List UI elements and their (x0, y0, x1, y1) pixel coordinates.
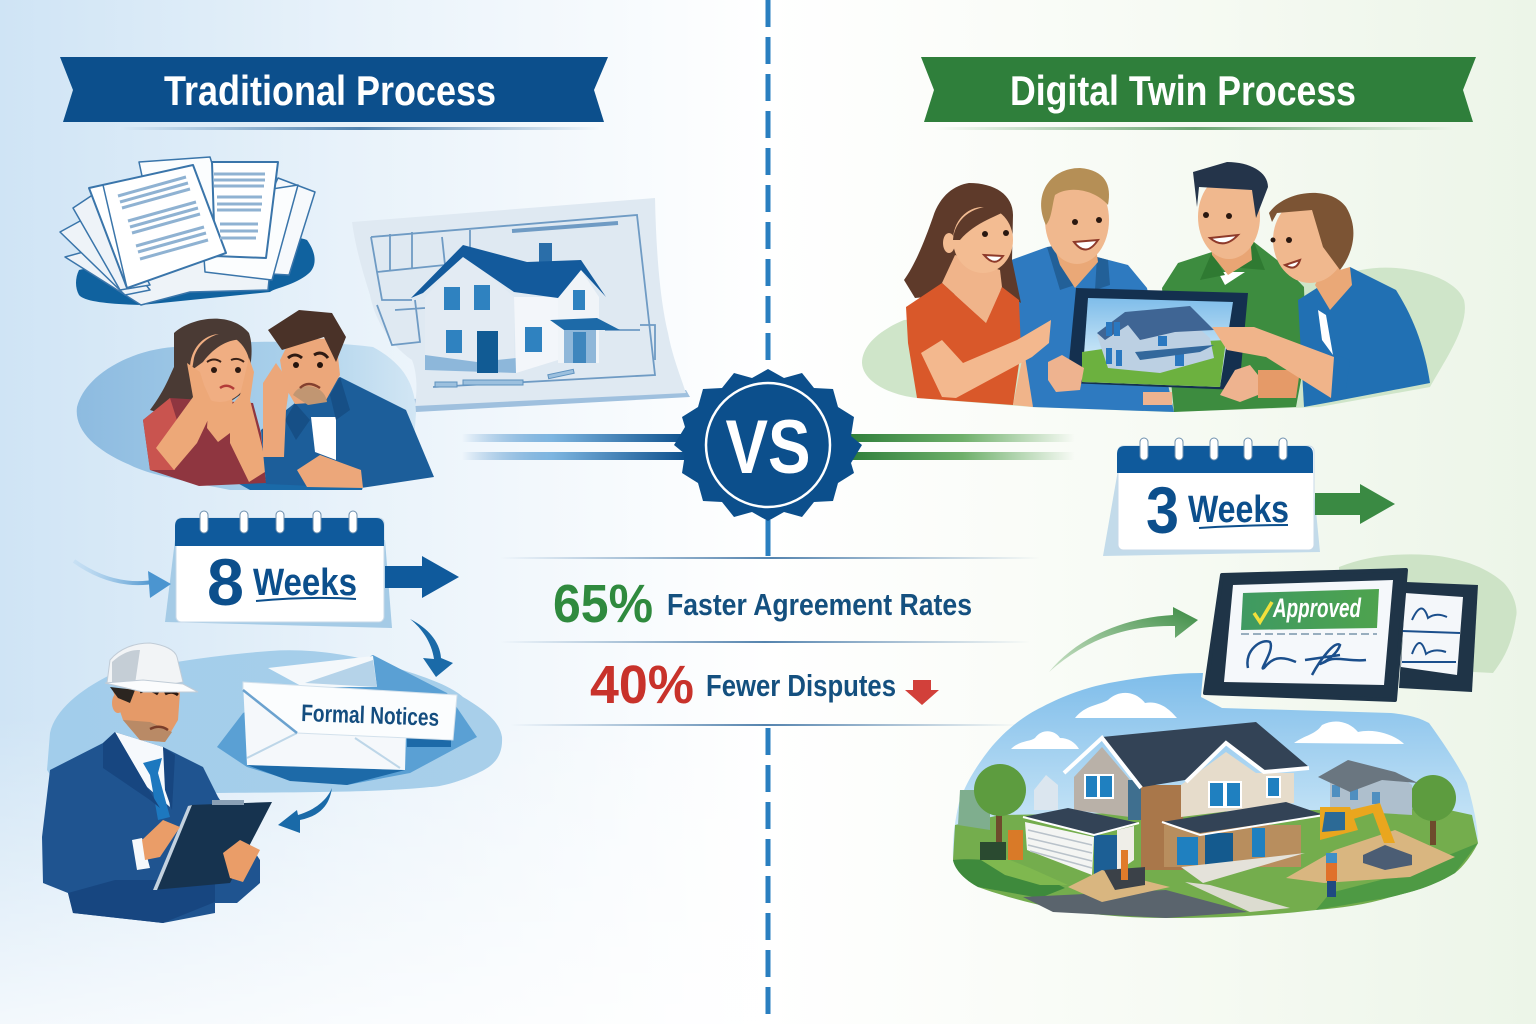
man 4 (1298, 267, 1430, 407)
arrow: into calendar (74, 561, 171, 598)
VS badge: VS (726, 405, 810, 490)
woman (904, 183, 1021, 303)
tablet (1067, 288, 1248, 390)
rules around stats (500, 557, 1040, 726)
calendar: 8 Weeks (165, 511, 392, 628)
driveway (1023, 890, 1248, 918)
clouds (1011, 693, 1404, 749)
excavator (1320, 803, 1395, 843)
stat: 40% Fewer Disputes (590, 655, 939, 715)
banner: Traditional Process: Traditional Process (164, 67, 496, 114)
center dashed divider (766, 0, 770, 1024)
arrow: green curve to tablet (1049, 607, 1198, 672)
inspector with clipboard (42, 643, 272, 923)
scene: new house with construction (953, 673, 1478, 918)
envelope: Formal Notices: Formal Notices (301, 700, 440, 732)
man 3 (1162, 242, 1306, 412)
happy team with tablet (862, 162, 1465, 412)
approval tablets: Approved (1272, 593, 1361, 623)
background: digital twin side (768, 0, 1536, 1024)
icon: house blueprint (352, 198, 690, 412)
stat: 65% Faster Agreement Rates: Faster Agreement Rates (667, 587, 972, 622)
banner: Digital Twin Process (921, 57, 1476, 130)
connector lines: digital twin (850, 434, 1075, 460)
envelope: Formal Notices (47, 650, 502, 793)
icon: red down arrow (905, 680, 939, 705)
calendar: 3 Weeks: 3 (1146, 473, 1179, 547)
trees (958, 764, 1456, 845)
approval tablets (1205, 554, 1517, 700)
banner: Digital Twin Process: Digital Twin Process (1010, 67, 1356, 114)
background: traditional side (0, 0, 768, 1024)
arrow: 8 weeks right (385, 556, 459, 598)
arrow: back to inspector (278, 788, 332, 833)
man 2 (1003, 247, 1174, 412)
stat: 40% Fewer Disputes: Fewer Disputes (706, 668, 896, 703)
arrow: down to notices (410, 619, 453, 677)
man (261, 377, 434, 488)
ground (953, 808, 1478, 918)
neighbour houses (1034, 775, 1058, 810)
banner: Traditional Process (60, 57, 608, 130)
dirt (1286, 830, 1455, 883)
main house (1074, 747, 1130, 817)
porch (1164, 825, 1301, 867)
icon: paper stack (60, 157, 315, 305)
stat: 65% Faster Agreement Rates: 65% (553, 574, 653, 634)
garage (1025, 822, 1094, 875)
calendar: 8 Weeks: 8 (207, 545, 244, 619)
woman (150, 319, 252, 425)
hedge and materials (981, 858, 1068, 885)
worried couple (77, 310, 434, 490)
arrow: 3 weeks right (1315, 484, 1395, 524)
calendar: 3 Weeks (1103, 438, 1320, 556)
connector lines: traditional (462, 434, 687, 460)
VS badge (674, 369, 862, 521)
house (425, 253, 514, 373)
calendar: 8 Weeks: Weeks (253, 562, 357, 604)
hands (1048, 355, 1084, 392)
calendar: 3 Weeks: Weeks (1188, 489, 1289, 531)
worker (1326, 853, 1337, 897)
stat: 65% Faster Agreement Rates (553, 574, 972, 634)
stat: 40% Fewer Disputes: 40% (590, 655, 694, 715)
